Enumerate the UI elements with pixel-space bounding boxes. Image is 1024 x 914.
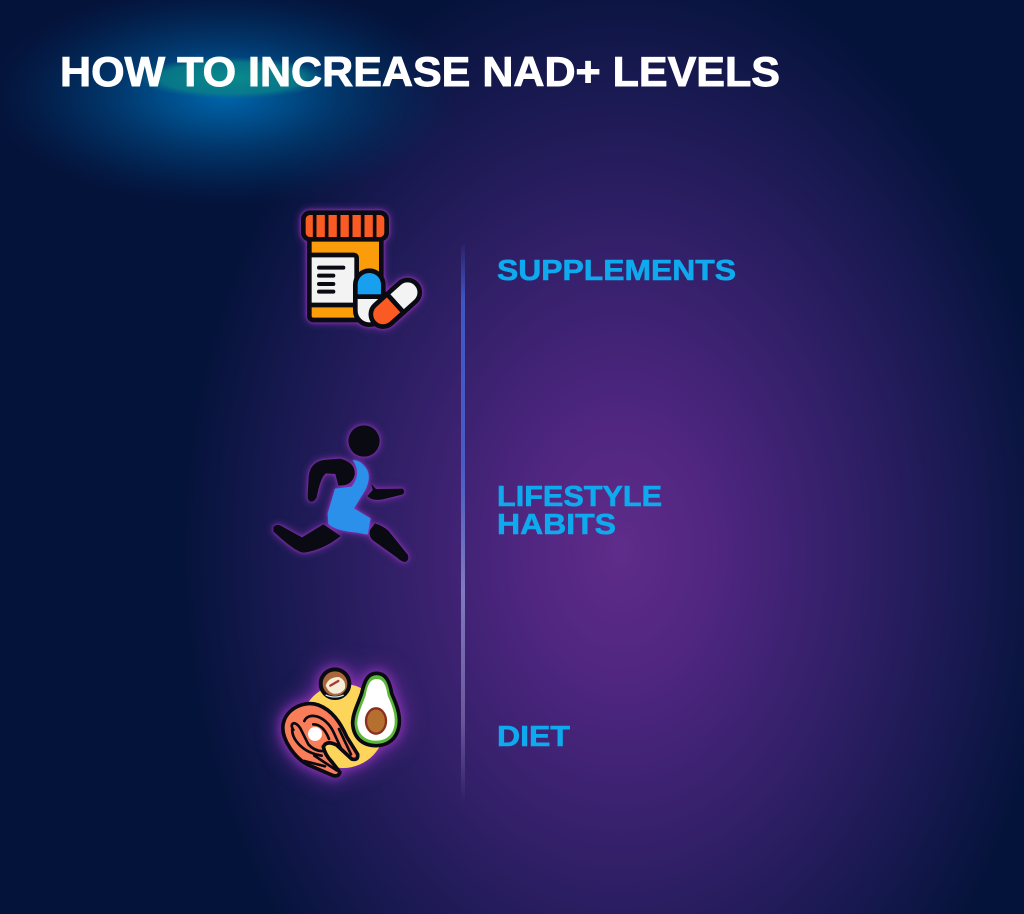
salmon steak: [283, 704, 358, 776]
label: lifestyle habits: LIFESTYLE: [497, 481, 662, 513]
label: diet: DIET: [497, 721, 570, 753]
icon: healthy food: [283, 669, 399, 776]
icon: supplement bottle and pills: [303, 213, 425, 332]
icon: runner: [273, 425, 408, 562]
avocado: [353, 673, 399, 746]
nut: [321, 669, 349, 698]
label: supplements: SUPPLEMENTS: [497, 255, 736, 287]
title: HOW TO INCREASE NAD+ LEVELS: [60, 48, 780, 95]
label: lifestyle habits: HABITS: [497, 509, 616, 541]
label: lifestyle habits: [497, 481, 662, 541]
vertical timeline line: [461, 245, 465, 802]
